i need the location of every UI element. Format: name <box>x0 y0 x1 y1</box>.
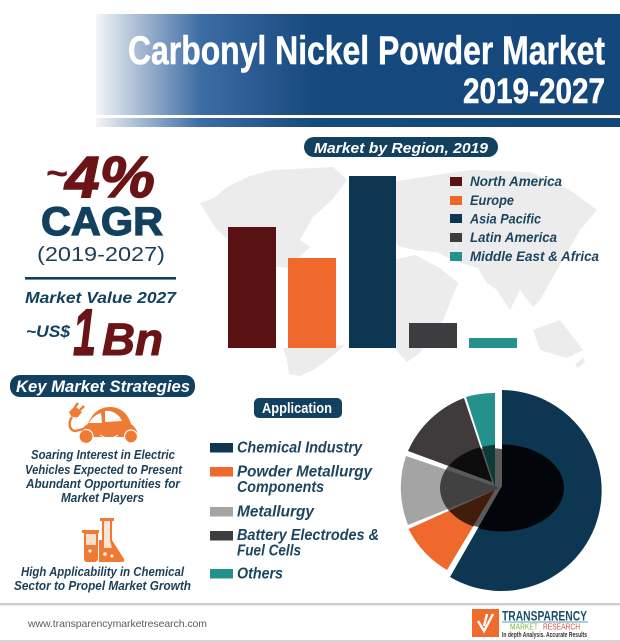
application heading: Application <box>262 401 332 417</box>
market value stat block <box>25 290 177 369</box>
logo: Transparency Market Research: TRANSPARENCY <box>502 608 587 624</box>
legend: regions: North America <box>470 173 562 189</box>
icon: electric car <box>69 403 138 444</box>
legend: regions: Asia Pacific <box>469 210 541 226</box>
CAGR stat block: 4% <box>64 145 155 210</box>
legend: application: Powder Metallurgy <box>237 464 373 481</box>
CAGR stat block: (2019-2027) <box>37 244 165 266</box>
legend: regions: Middle East & Africa <box>470 248 599 264</box>
strategy text: electric vehicles: Abundant Opportunities for <box>25 477 181 491</box>
website url: www.transparencymarketresearch.com <box>27 618 207 630</box>
pie chart: application <box>401 390 602 591</box>
legend: regions: Europe <box>470 192 514 208</box>
icon: lab flasks <box>82 518 124 562</box>
strategy text: chemical sector: Sector to Propel Market Growth <box>14 579 191 593</box>
logo: Transparency Market Research <box>472 608 588 639</box>
strategy text: electric vehicles: Soaring Interest in Electric <box>31 448 175 462</box>
strategy text: chemical sector: High Applicability in Chemical <box>21 565 184 579</box>
legend: regions: Latin America <box>470 229 557 245</box>
legend: application: Others <box>237 565 283 582</box>
market value stat block: 1 <box>73 295 96 369</box>
legend: application <box>210 440 379 582</box>
market by region heading: Market by Region, 2019 <box>314 140 489 157</box>
market value stat block: ~US$ <box>26 322 71 341</box>
legend: application: Fuel Cells <box>237 543 301 560</box>
title banner <box>96 14 620 127</box>
world map background <box>200 167 597 376</box>
legend: application: Chemical Industry <box>237 440 363 457</box>
legend: application: Metallurgy <box>237 504 315 521</box>
market value stat block: Bn <box>102 314 163 365</box>
strategy text: chemical sector <box>14 565 191 593</box>
market value stat block: Market Value 2027 <box>25 290 177 307</box>
bar chart: market by region <box>228 176 517 348</box>
logo: Transparency Market Research: MARKET <box>510 622 538 632</box>
CAGR stat block: CAGR <box>41 200 163 244</box>
CAGR stat block <box>37 145 165 266</box>
strategy text: electric vehicles <box>25 448 183 505</box>
strategy text: electric vehicles: Vehicles Expected to Present <box>25 463 183 477</box>
key market strategies heading: Key Market Strategies <box>16 377 190 396</box>
CAGR stat block: ~ <box>46 153 68 195</box>
legend: application: Battery Electrodes & <box>237 527 379 544</box>
logo: Transparency Market Research: RESEARCH <box>543 622 580 632</box>
strategy text: electric vehicles: Market Players <box>61 491 144 505</box>
legend: regions <box>450 173 599 264</box>
legend: application: Components <box>237 479 324 496</box>
title <box>128 29 605 111</box>
